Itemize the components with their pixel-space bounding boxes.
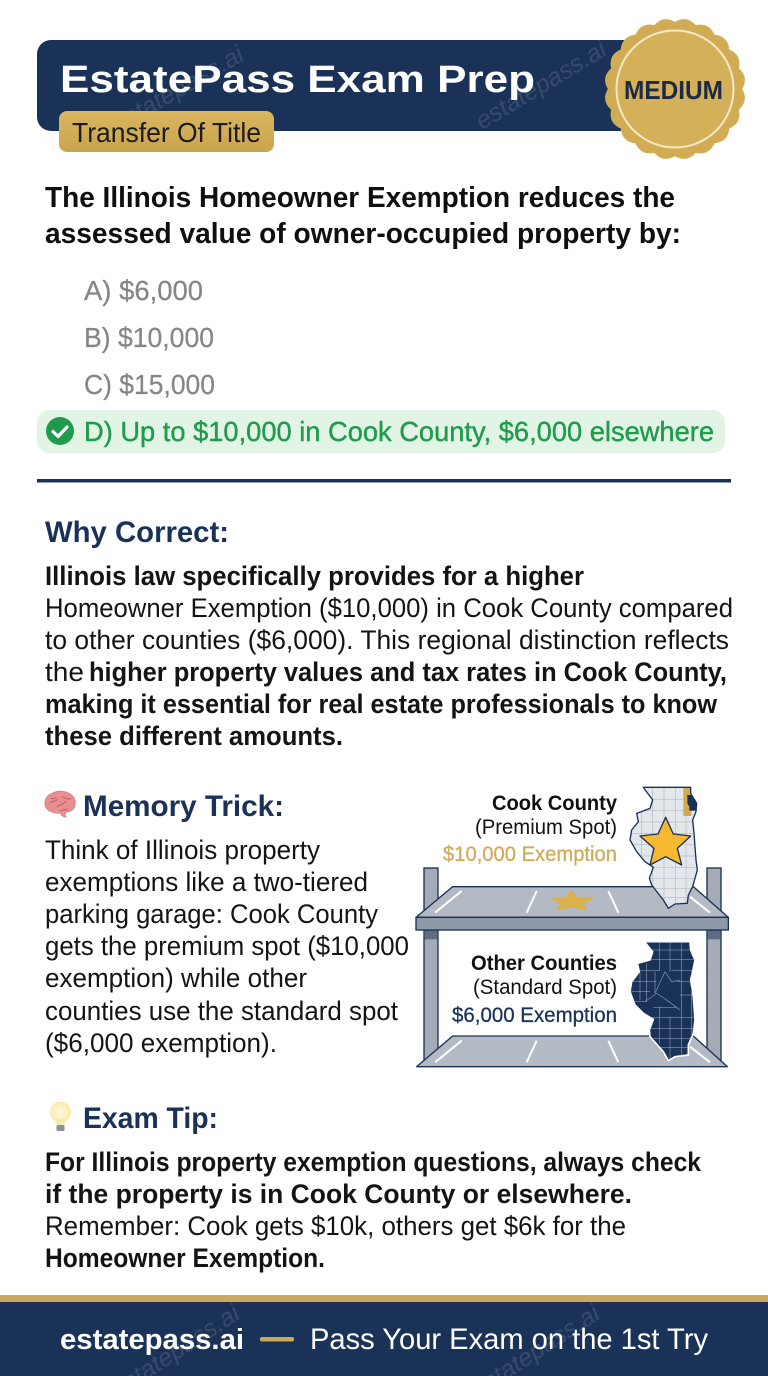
exam tip text [45, 1147, 701, 1273]
memory trick text: parking garage: Cook County [45, 899, 379, 929]
label: Cook County: (Premium Spot) [475, 815, 617, 839]
option C: C) $15,000 [84, 369, 215, 400]
icon: brain [45, 791, 75, 817]
correct answer D: D) Up to $10,000 in Cook County, $6,000 elsewhere [84, 416, 714, 447]
footer tagline: Pass Your Exam on the 1st Try [310, 1323, 708, 1356]
memory trick text: ($6,000 exemption). [45, 1028, 277, 1058]
explanation text: higher property values and tax rates in Cook County, [89, 657, 727, 687]
difficulty badge [606, 20, 744, 158]
explanation text: the [45, 657, 84, 687]
option A: A) $6,000 [84, 275, 203, 306]
label: Other Counties [452, 951, 617, 1027]
explanation text: making it essential for real estate professionals to know [45, 689, 717, 719]
heading: exam tip: Exam Tip: [83, 1102, 218, 1135]
heading: memory trick: Memory Trick: [83, 790, 284, 823]
header banner [37, 35, 647, 152]
watermark: header: estatepass.ai [107, 40, 250, 138]
exam tip text: if the property is in Cook County or elsewhere. [45, 1179, 632, 1209]
memory trick text: Think of Illinois property [45, 835, 321, 865]
garage posts [424, 868, 721, 1061]
memory trick text: counties use the standard spot [45, 996, 399, 1026]
heading: why correct: Why Correct: [45, 516, 229, 549]
question [45, 182, 681, 250]
exam tip text: Homeowner Exemption. [45, 1243, 325, 1273]
footer dash [260, 1337, 294, 1342]
question: The Illinois Homeowner Exemption reduces the [45, 182, 675, 214]
icon: light bulb [50, 1102, 71, 1131]
explanation text: to other counties ($6,000). This regional distinction reflects [45, 625, 729, 655]
icon: green check [46, 417, 74, 445]
exam tip text: Remember: Cook gets $10k, others get $6k for the [45, 1211, 626, 1241]
parking garage illustration [416, 787, 728, 1067]
explanation text: Homeowner Exemption ($10,000) in Cook County compared [45, 593, 733, 623]
correct answer D [37, 410, 725, 453]
label: Other Counties: (Standard Spot) [473, 975, 617, 999]
exam tip text: For Illinois property exemption questions, always check [45, 1147, 701, 1177]
label: Cook County: Cook County [492, 791, 617, 815]
footer site name: estatepass.ai [60, 1324, 244, 1356]
memory trick text: exemption) while other [45, 963, 307, 993]
upper deck [416, 887, 728, 930]
difficulty badge: MEDIUM [624, 77, 723, 105]
lower deck [417, 1036, 727, 1067]
map: other counties [630, 942, 695, 1062]
explanation text: these different amounts. [45, 721, 343, 751]
question: assessed value of owner-occupied property by: [45, 218, 681, 250]
memory trick text: gets the premium spot ($10,000 [45, 931, 409, 961]
explanation text: Illinois law specifically provides for a higher [45, 561, 584, 591]
option B: B) $10,000 [84, 322, 214, 353]
title: EstatePass Exam Prep [60, 59, 535, 101]
memory trick text: exemptions like a two-tiered [45, 867, 368, 897]
label: Cook County: $10,000 Exemption [443, 842, 617, 866]
label: Cook County [443, 791, 617, 866]
label: Other Counties: Other Counties [471, 951, 617, 975]
label: Other Counties: $6,000 Exemption [452, 1003, 617, 1027]
watermark: header right: estatepass.ai [471, 35, 613, 135]
footer [0, 1295, 768, 1376]
icon: gold star [640, 817, 691, 865]
memory trick text [45, 835, 409, 1058]
topic pill: Transfer Of Title [72, 117, 261, 148]
map: Cook County [627, 787, 700, 913]
explanation text [45, 561, 733, 751]
